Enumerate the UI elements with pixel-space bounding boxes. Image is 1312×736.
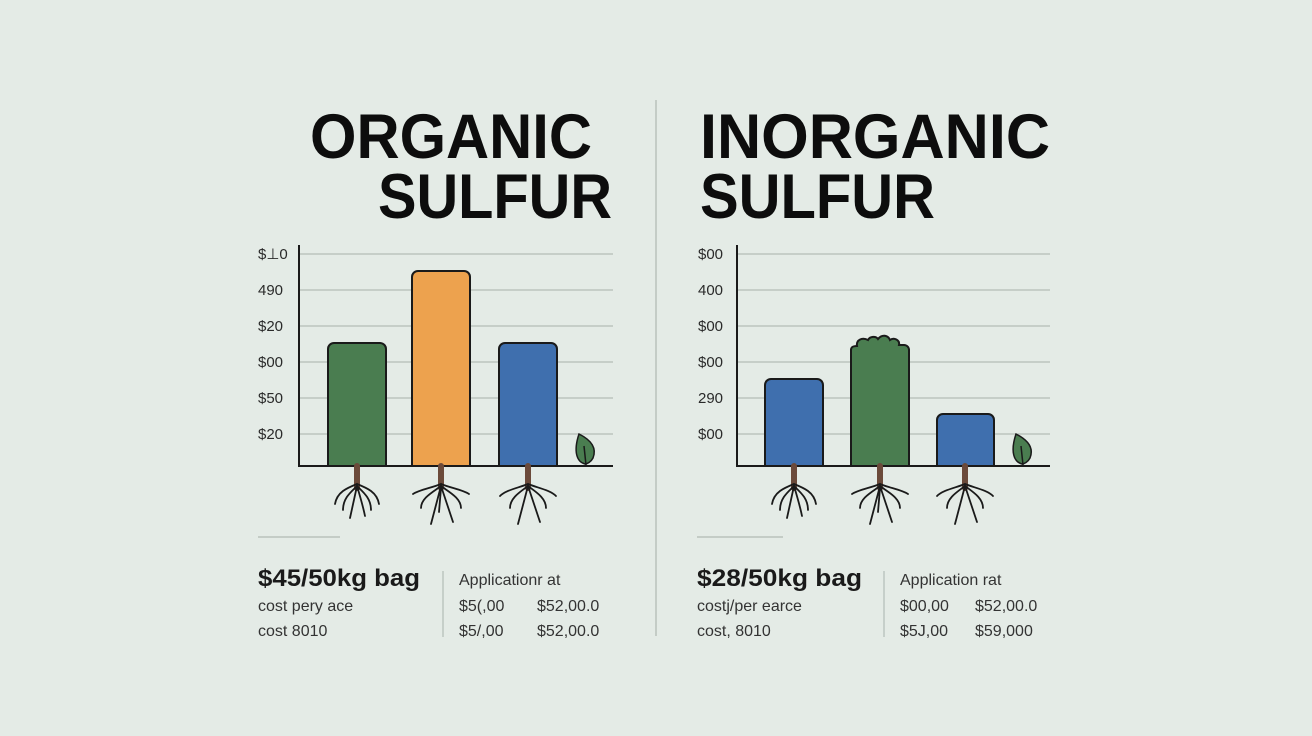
cost block: organic: $5/,00 — [459, 623, 504, 640]
y-axis labels: 400 — [698, 282, 723, 299]
cost block: organic: cost pery ace — [258, 598, 353, 615]
cost block: inorganic: $59,000 — [975, 623, 1033, 640]
y-axis labels: 290 — [698, 390, 723, 407]
cost block: inorganic — [697, 565, 1037, 640]
y-axis labels: $00 — [698, 354, 723, 371]
short rules — [258, 536, 340, 538]
title: organic sulfur — [310, 102, 612, 232]
y-axis labels: $00 — [698, 318, 723, 335]
cost block: inorganic: $28/50kg bag — [697, 565, 862, 592]
cost block: organic: cost 8010 — [258, 623, 327, 640]
y-axis labels: $⊥0 — [258, 246, 288, 263]
cost block: inorganic: $5J,00 — [900, 623, 948, 640]
icon: roots — [335, 466, 556, 524]
y-axis labels: $00 — [698, 246, 723, 263]
chart: inorganic — [698, 245, 1050, 524]
y-axis labels: 490 — [258, 282, 283, 299]
cost block: organic — [258, 565, 599, 640]
chart: organic — [258, 245, 613, 524]
title: inorganic sulfur — [700, 102, 1050, 232]
icon: roots — [772, 466, 993, 524]
cost block: organic: Applicationr at — [459, 572, 561, 589]
title: organic sulfur: SULFUR — [378, 162, 612, 232]
cost block: inorganic: $52,00.0 — [975, 598, 1037, 615]
y-axis labels: $20 — [258, 426, 283, 443]
icon: leaf — [576, 434, 594, 465]
title: inorganic sulfur: SULFUR — [700, 162, 935, 232]
y-axis labels — [698, 246, 723, 443]
bars — [765, 336, 994, 466]
y-axis labels: $50 — [258, 390, 283, 407]
cost block: inorganic: cost, 8010 — [697, 623, 771, 640]
y-axis labels: $20 — [258, 318, 283, 335]
title: organic sulfur: ORGANIC — [310, 102, 592, 172]
y-axis labels — [258, 246, 288, 443]
cost block: inorganic: $00,00 — [900, 598, 949, 615]
bars — [328, 271, 557, 466]
cost block: organic: $52,00.0 — [537, 598, 599, 615]
cost block: organic: $5(,00 — [459, 598, 504, 615]
y-axis labels: $00 — [258, 354, 283, 371]
cost block: organic: $45/50kg bag — [258, 565, 420, 592]
divider — [655, 100, 657, 636]
cost block: inorganic: costj/per earce — [697, 598, 802, 615]
y-axis labels: $00 — [698, 426, 723, 443]
cost block: inorganic: Application rat — [900, 572, 1002, 589]
icon: leaf — [1013, 434, 1031, 465]
title: inorganic sulfur: INORGANIC — [700, 102, 1050, 172]
cost block: organic: $52,00.0 — [537, 623, 599, 640]
